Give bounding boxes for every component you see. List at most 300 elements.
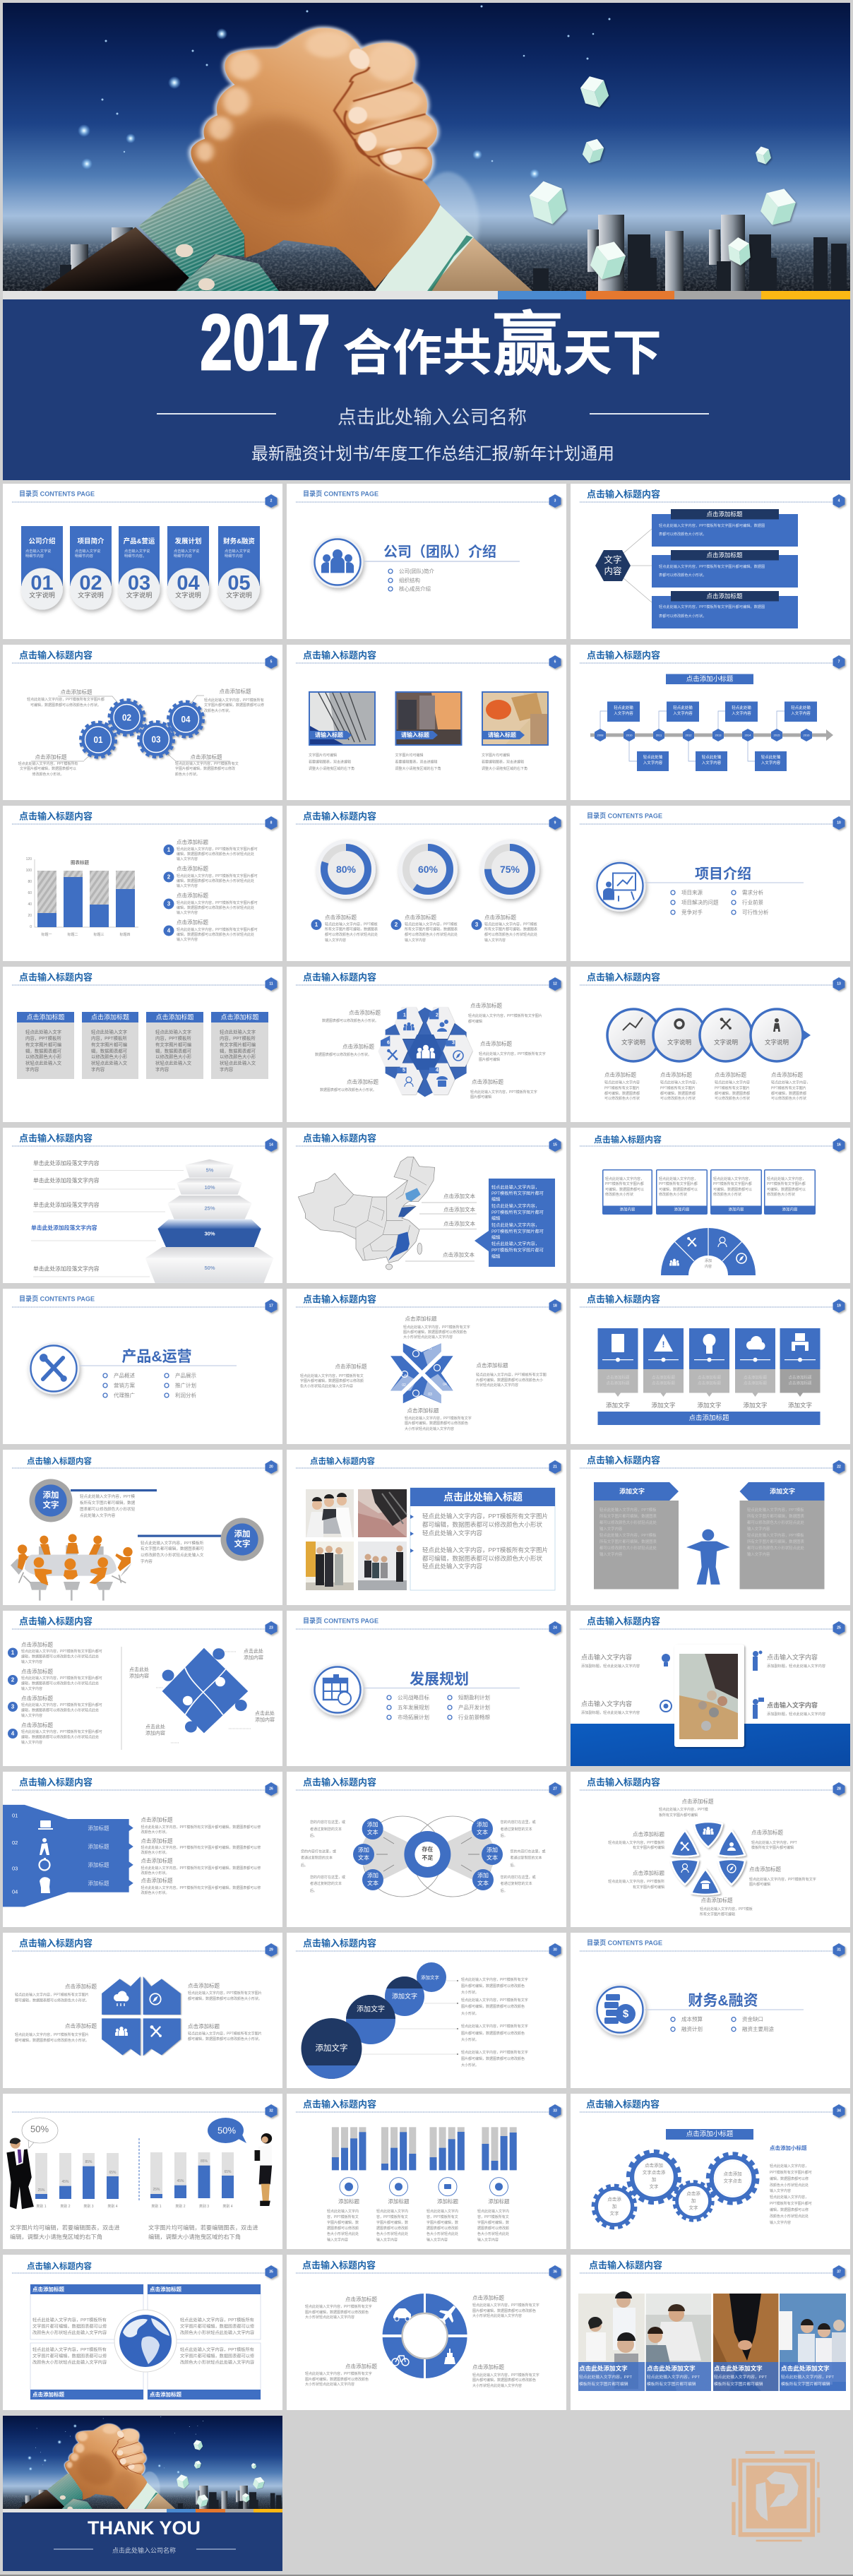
list item 2: 输入文字内容 [21,1686,42,1691]
label bottom left: 轻点此处输入文字内容，PPT模板所有文字图片 [15,2032,89,2037]
text block 1 [461,1977,528,1995]
label top right: 点击添加标题 [219,688,251,695]
text 2: 以修改颜色大小形状轻点此处输入文 [141,1552,204,1558]
box 1: 点击添加标题 [706,511,743,518]
outline rings [362,1816,493,1897]
card outlines [30,2284,261,2399]
panel: slide 26 four steps [3,1772,282,1927]
caption text 3 [714,2364,767,2387]
right bar chart: 45% [177,2179,184,2183]
header [580,1294,845,1313]
column 2: 添加文字 [651,1402,676,1409]
column 4: 辑，数据图表都可 [220,1048,256,1054]
pyramid labels: 单击此处添加段落文字内容 [33,1265,100,1272]
illustration: meeting table [11,1534,133,1601]
column 4: 有文字图片都可编 [220,1041,256,1048]
callout box: PPT模板所有文字图片都可 [491,1247,544,1253]
gears 01-04 [80,700,203,757]
pyramid labels: 单击此处添加段落文字内容 [33,1159,100,1167]
header: 4 [838,499,840,503]
text 1 [80,1493,136,1518]
bullet list: 竞争对手 [681,908,703,915]
left bar chart: 45% [61,2180,69,2184]
photo 1 [578,2291,645,2391]
header [580,2099,845,2118]
text 2: 有文字图片都可编辑，数据图表都可 [141,1546,204,1551]
label bottom right: 图片都可编辑，数据图表都可以修改颜色 [472,2378,536,2383]
card text bottom left [32,2347,107,2366]
text block 2 [461,1998,528,2016]
header: 点击输入标题内容 [19,1133,93,1144]
column 1: 有文字图片都可编 [25,1041,61,1048]
text 2 [141,1540,204,1564]
right label [476,1361,547,1388]
star numbers: 02 [402,1383,406,1388]
year labels [597,733,810,737]
panel: slide 14 pyramid [3,1128,282,1283]
header [296,1938,561,1957]
left label [300,1363,367,1388]
hexagon cluster [378,1007,472,1097]
card 3 [119,526,160,610]
header: 目录页 CONTENTS PAGE [587,1939,662,1948]
header [296,1133,561,1152]
list item 2: 2 [11,1676,15,1683]
list item 1: 轻点此处输入文字内容，PPT模板所有文字图片都可 [21,1649,102,1654]
panel: slide 13 four rings [571,967,850,1122]
label bottom left [18,753,78,777]
card 3: 产品&营运 [124,537,155,545]
stacked bar chart: 20 [28,914,32,918]
label top: 板所有文字图片都可编辑 [659,1813,698,1818]
right texts: 后。 [501,1833,508,1838]
subtitle box: 点击添加小标题 [686,2130,734,2138]
caption text 3: 模板所有文字图片都可编辑 [714,2381,763,2387]
left text 2 [581,1700,640,1715]
card 5 [218,526,260,610]
list item 2: 输入文字内容 [177,883,198,888]
card 4: 明细节内容 [174,553,192,559]
header [296,1294,561,1313]
column 1 [597,1328,638,1409]
card 2 [656,1169,708,1215]
panel: slide 11 four columns [3,967,282,1122]
gear numbers: 01 [93,734,103,745]
ring 60% [398,840,458,899]
label bottom: 点击添加标题 [700,1897,733,1904]
text column 2: 色大小形状轻点此处 [376,2231,408,2236]
icon: calendar badge [312,1664,363,1716]
nodes: 文本 [367,1880,378,1887]
panel: slide 29 notched blocks [3,1933,282,2088]
list item 2: 编辑，数据图表都可以修改颜色大小形状轻点此处 [21,1681,99,1686]
list item 2: 点击添加标题 [21,1668,53,1675]
column 1: 字内容 [25,1066,40,1072]
header: 点击输入标题内容 [303,1938,376,1949]
panel: slide 18 star diagram [287,1289,566,1444]
puzzle labels: 点击此处 [129,1666,149,1672]
bullet list: 成本预算 [681,2015,703,2022]
card 1: 公司介绍 [28,537,56,545]
card 1: 文字说明 [29,591,55,599]
nodes: 文本 [358,1854,369,1861]
text column 3: 字图片都可编辑，数 [426,2220,458,2225]
header: 2 [270,499,273,503]
nodes: 文本 [487,1854,498,1861]
lower boxes: 轻点此处输 [702,754,722,760]
card 3 [710,1169,762,1215]
side text: 轻点此处输入文字内容， [770,2164,809,2169]
header: 点击输入标题内容 [587,1777,660,1788]
column 2: 内容，PPT模板所 [91,1035,127,1041]
card 3: 点击输入文字说 [124,548,150,554]
gear D [708,2154,757,2202]
connectors [600,711,785,761]
side text [770,2144,812,2225]
caption 1: PPT模板所有文字图片 [604,1086,640,1090]
card 1: 添加内容 [619,1206,636,1212]
header: 33 [553,2109,557,2113]
text block 4: 轻点此处输入文字内容，PPT模板所有文字 [461,2050,528,2055]
gear B: 文字点击添 [643,2169,666,2175]
stacked bar chart [26,857,138,937]
list item 4: 编辑，数据图表都可以修改颜色大小形状轻点此处 [21,1734,99,1740]
column 4: 以修改颜色大小形 [220,1054,256,1059]
label top right: 轻点此处输入文字内容，PPT模板所有 [204,698,264,703]
caption 4 [771,1071,810,1101]
hexagon [595,550,631,581]
thank you heading: THANK YOU [88,2517,201,2539]
caption 4: 可以修改颜色大小形状 [771,1096,806,1101]
center ring: 存在 [422,1846,433,1853]
panel: slide 24 development plan [287,1611,566,1766]
header: 27 [553,1787,557,1791]
watermark stamp [732,2450,820,2541]
label left 1 [322,1008,381,1023]
bottom bar [597,1412,821,1425]
panel: slide 22 person and gray boxes [571,1450,850,1605]
label upper left [608,1830,664,1850]
section heading: 公司（团队）介绍 [383,544,496,560]
hexagon: 内容 [604,566,622,576]
column 4: 轻点此处输入文字 [220,1028,256,1035]
right box: 轻点此处输入文字内容，PPT模板 [747,1532,804,1538]
header: 点击输入标题内容 [587,489,660,500]
panel: slide 2 contents [3,484,282,639]
card 3: 修改颜色大小形状 [713,1192,741,1197]
left box: 所有文字图片都可编辑，数据图表 [600,1513,657,1519]
right label: 片都可编辑，数据图表都可以修改颜色大小 [476,1378,543,1383]
panel: slide 28 petals [571,1772,850,1927]
label left 3 [320,1078,378,1092]
label bottom right: 点击添加标题 [472,2363,504,2370]
card text top right: 改颜色大小形状轻点此处输入文字内容 [180,2330,254,2336]
caption 2 [660,1071,699,1101]
column 2: 点击添加标题 [652,1374,675,1380]
nodes: 添加 [367,1871,378,1878]
label right 2: 轻点此处输入文字内容，PPT模板所有文字 [479,1051,546,1056]
petal icons [680,1827,736,1889]
column 5: 点击添加标题 [788,1380,812,1385]
card 2: PPT模板所有文字图片都 [659,1181,698,1186]
header: 17 [269,1304,273,1308]
nodes: 添加 [477,1820,488,1827]
card 1: 轻点此处输入文字内容， [605,1176,644,1181]
left bar chart: 85% [85,2160,93,2164]
column 1: 辑，数据图表都可 [25,1048,62,1054]
pyramid labels: 单击此处添加段落文字内容 [33,1176,100,1183]
label right 3 [470,1078,537,1099]
header: 点击输入标题内容 [27,1456,92,1466]
caption 2: 输入文字内容 [405,938,426,943]
card 2: 明细节内容 [75,553,93,559]
icons [660,1651,764,1719]
header: 目录页 CONTENTS PAGE [587,812,662,821]
left texts: 后。 [310,1833,317,1838]
caption left: 编辑，调整大小请拖曳区域的右下角 [10,2233,102,2240]
pyramid percentages: 25% [204,1205,215,1212]
callout box: PPT模板所有文字图片都可 [491,1191,544,1196]
bubble left: 50% [30,2124,49,2134]
text panel: 轻点此处输入文字内容，PPT模板所有文字图片 [422,1546,548,1554]
header: 点击输入标题内容 [302,2260,376,2271]
circle 1: 文字 [42,1500,59,1510]
header: 点击输入标题内容 [303,650,376,661]
callout box: PPT模板所有文字图片都可 [491,1229,544,1234]
card text top right [180,2318,255,2336]
ring 4: 文字说明 [765,1039,789,1046]
header: 目录页 CONTENTS PAGE [19,490,95,499]
caption 4: PPT模板所有文字图片 [771,1086,806,1090]
panel: slide 23 puzzle [3,1611,282,1766]
card text top right: 轻点此处输入文字内容，PPT模板所有 [180,2318,254,2323]
circle 2 [346,1995,395,2044]
half ring [661,1228,756,1275]
photo: pens [358,1489,407,1537]
text column 2: 输入文字内容 [376,2237,398,2243]
bubble right [208,2118,246,2143]
column 1: 点击添加标题 [606,1380,630,1385]
list item 4: 编辑，数据图表都可以修改颜色大小形状轻点此处 [177,932,254,937]
timeline arrow [590,729,833,741]
caption 3: 都可编辑，数据图表都 [715,1091,750,1096]
hexagon cluster: 1 [403,1013,406,1018]
upper boxes: 入文字内容 [673,710,693,716]
text 1: 点此处输入文字内容 [80,1513,116,1518]
label upper left: 有文字图片都可编辑 [633,1845,664,1850]
label left 2: 点击添加标题 [342,1042,374,1049]
nodes: 添加 [367,1820,378,1827]
header: 21 [553,1465,557,1469]
upper boxes: 轻点此处输 [791,705,811,710]
title: 2017 [200,298,330,387]
item 1 [141,1816,261,1835]
text column 4: 字图片都可编辑，数 [477,2220,509,2225]
card text top left [32,2318,107,2336]
right bar chart: 85% [201,2159,208,2164]
caption 2: 轻点此处输入文字内容， [660,1080,699,1085]
globe [114,2310,177,2372]
header: 点击输入标题内容 [310,1456,375,1466]
list item 4: 轻点此处输入文字内容，PPT模板所有文字图片都可 [21,1729,102,1734]
item 1: 改颜色大小形状。 [141,1830,169,1835]
bullet list: 利润分析 [175,1391,196,1398]
gear B [628,2152,679,2202]
hexagon cluster: 5 [402,1068,405,1073]
segmented ring [382,2294,467,2378]
card 2: 修改颜色大小形状 [659,1192,687,1197]
text column 4 [477,2209,509,2243]
left box: 都可以修改颜色大小形状轻点此处 [600,1520,657,1525]
nodes: 添加 [487,1846,498,1853]
header [580,1777,845,1796]
caption 3: PPT模板所有文字图片 [715,1086,750,1090]
card 3: 添加内容 [728,1206,744,1212]
caption 2: 都可编辑，数据图表都 [660,1091,696,1096]
hexagon icons [387,1020,463,1087]
callout box: 编辑 [491,1216,500,1222]
label right 1: 点击添加标题 [470,1001,502,1008]
header: 点击输入标题内容 [19,650,93,661]
column 1: 轻点此处输入文字 [25,1028,61,1035]
gear C: 加 [691,2198,696,2203]
panel: cover slide [3,3,850,480]
label top right: 改颜色大小形状。 [204,708,232,713]
label top right [204,688,264,713]
right bar chart [150,2152,234,2209]
blue step shape: 02 [12,1839,18,1846]
label bottom: 所有文字图片都可编辑 [700,1912,735,1916]
subtitle box: 点击添加小标题 [686,674,734,683]
section heading: 发展规划 [410,1671,469,1688]
card 4 [764,1169,816,1215]
text 2: 字内容 [141,1558,153,1564]
tablet with money photo [674,1645,744,1747]
top label: 大小形状轻点此处输入文字内容 [403,1335,453,1340]
header: 点击输入标题内容 [19,1938,93,1949]
circle 2 [220,1518,264,1561]
card 2: 可编辑，数据图表都可以 [659,1187,698,1192]
list item 1: 轻点此处输入文字内容，PPT模板所有文字图片都可 [177,847,258,852]
caption 2: 点击添加标题 [660,1071,692,1078]
column 3: 点击添加标题 [155,1013,194,1021]
item 4: 改颜色大小形状。 [141,1890,169,1895]
caption 1: 点击添加标题 [604,1071,636,1078]
bottom label: 轻点此处输入文字内容，PPT模板所有文字 [405,1416,472,1421]
left bar chart [35,2153,119,2209]
header: 点击输入标题内容 [587,1616,660,1627]
text column 1: 轻点此处输入文字内 [327,2209,359,2214]
panel: slide 6 three photos [287,645,566,800]
caption text 1: 模板所有文字图片都可编辑 [579,2381,628,2387]
left box: 都可以修改颜色大小形状轻点此处 [600,1545,657,1551]
bottom bar: 点击添加标题 [688,1414,729,1422]
card 5: 财务&融资 [223,537,255,545]
header: 26 [269,1787,273,1791]
panel: slide 21 photos and text [287,1450,566,1605]
text panel: 都可编辑，数据图表都可以修改颜色大小形状 [422,1521,543,1528]
header: 15 [553,1143,557,1147]
leader lines [362,1980,458,2055]
panel: slide 7 timeline [571,645,850,800]
icon: tools badge [28,1343,79,1394]
right box: 都可以修改颜色大小形状轻点此处 [747,1545,804,1551]
caption 2: 2 [395,922,398,928]
column 3: 状轻点此处输入文 [155,1059,192,1066]
right box: 轻点此处输入文字内容，PPT模板 [747,1507,804,1513]
header: 目录页 CONTENTS PAGE [303,490,378,499]
thank you photo [3,2416,282,2511]
column 3 [689,1328,729,1409]
right texts: 者通过复制您的文本 [501,1881,532,1886]
column 4 [211,1012,268,1079]
photo 3: 请输入标题 [488,732,516,739]
header [12,811,277,830]
column 1: 点击添加标题 [26,1013,65,1021]
arrows [376,1837,479,1871]
left box: 轻点此处输入文字内容，PPT模板 [600,1507,657,1513]
upper boxes: 轻点此处输 [614,705,633,710]
text column 4: 据图表都可以修改颜 [477,2226,509,2231]
puzzle labels: 添加内容 [244,1654,263,1661]
card 4: 文字说明 [175,591,201,599]
bar group 2 [381,2127,416,2170]
circle 4 [417,1962,446,1992]
card text bottom right: 轻点此处输入文字内容，PPT模板所有 [180,2347,254,2353]
right box: 所有文字图片都可编辑，数据图表 [747,1513,804,1519]
top label [403,1315,470,1340]
label top right: 轻点此处输入文字内容，PPT模板所有文字图片 [188,1991,262,1996]
pyramid labels: 单击此处添加段落文字内容 [31,1224,97,1232]
right box: 输入文字内容 [747,1526,770,1532]
circle 1 [301,2017,364,2081]
circle 3 [385,1976,424,2016]
gear numbers: 04 [181,714,191,724]
list item 3: 编辑，数据图表都可以修改颜色大小形状轻点此处 [21,1707,99,1713]
title: 合作共 [342,326,492,381]
list item 3: 点击添加标题 [21,1695,53,1702]
half ring: 内容 [705,1264,712,1269]
column 3: 点击添加标题 [698,1380,721,1385]
list item 4: 轻点此处输入文字内容，PPT模板所有文字图片都可 [177,927,258,932]
caption text 2: 点击此处添加文字 [647,2364,696,2372]
icon: team badge [312,537,363,588]
card 1 [602,1169,652,1215]
bullet list [388,568,434,592]
gear C: 点击添 [686,2190,700,2196]
header: 32 [269,2109,273,2113]
bullet list: 推广计划 [175,1381,196,1388]
header [296,490,561,508]
column 2: 点击添加标题 [91,1013,129,1021]
text column 4: 色大小形状轻点此处 [477,2231,509,2236]
callout box: 轻点此处输入文字内容， [491,1222,539,1228]
left text 1: 点击输入文字内容 [581,1653,632,1661]
header: 点击输入标题内容 [594,1134,662,1145]
year labels: 2008 [597,733,604,737]
label bottom right [188,2022,262,2041]
column 4: 点击添加标题 [744,1374,767,1380]
panel: slide 20 meeting [3,1450,282,1605]
bar 1 [71,1489,157,1491]
column 1: 内容，PPT模板所 [25,1035,61,1041]
card text bottom left: 改颜色大小形状轻点此处输入文字内容 [32,2360,107,2366]
column 5: 点击添加标题 [788,1374,812,1380]
list item 4 [8,1722,102,1745]
list item 1: 编辑，数据图表都可以修改颜色大小形状轻点此处 [177,852,254,857]
header [296,972,561,991]
item 1: 轻点此处输入文字内容，PPT模板所有文字图片都可编辑，数据图表都可以修 [141,1825,261,1830]
